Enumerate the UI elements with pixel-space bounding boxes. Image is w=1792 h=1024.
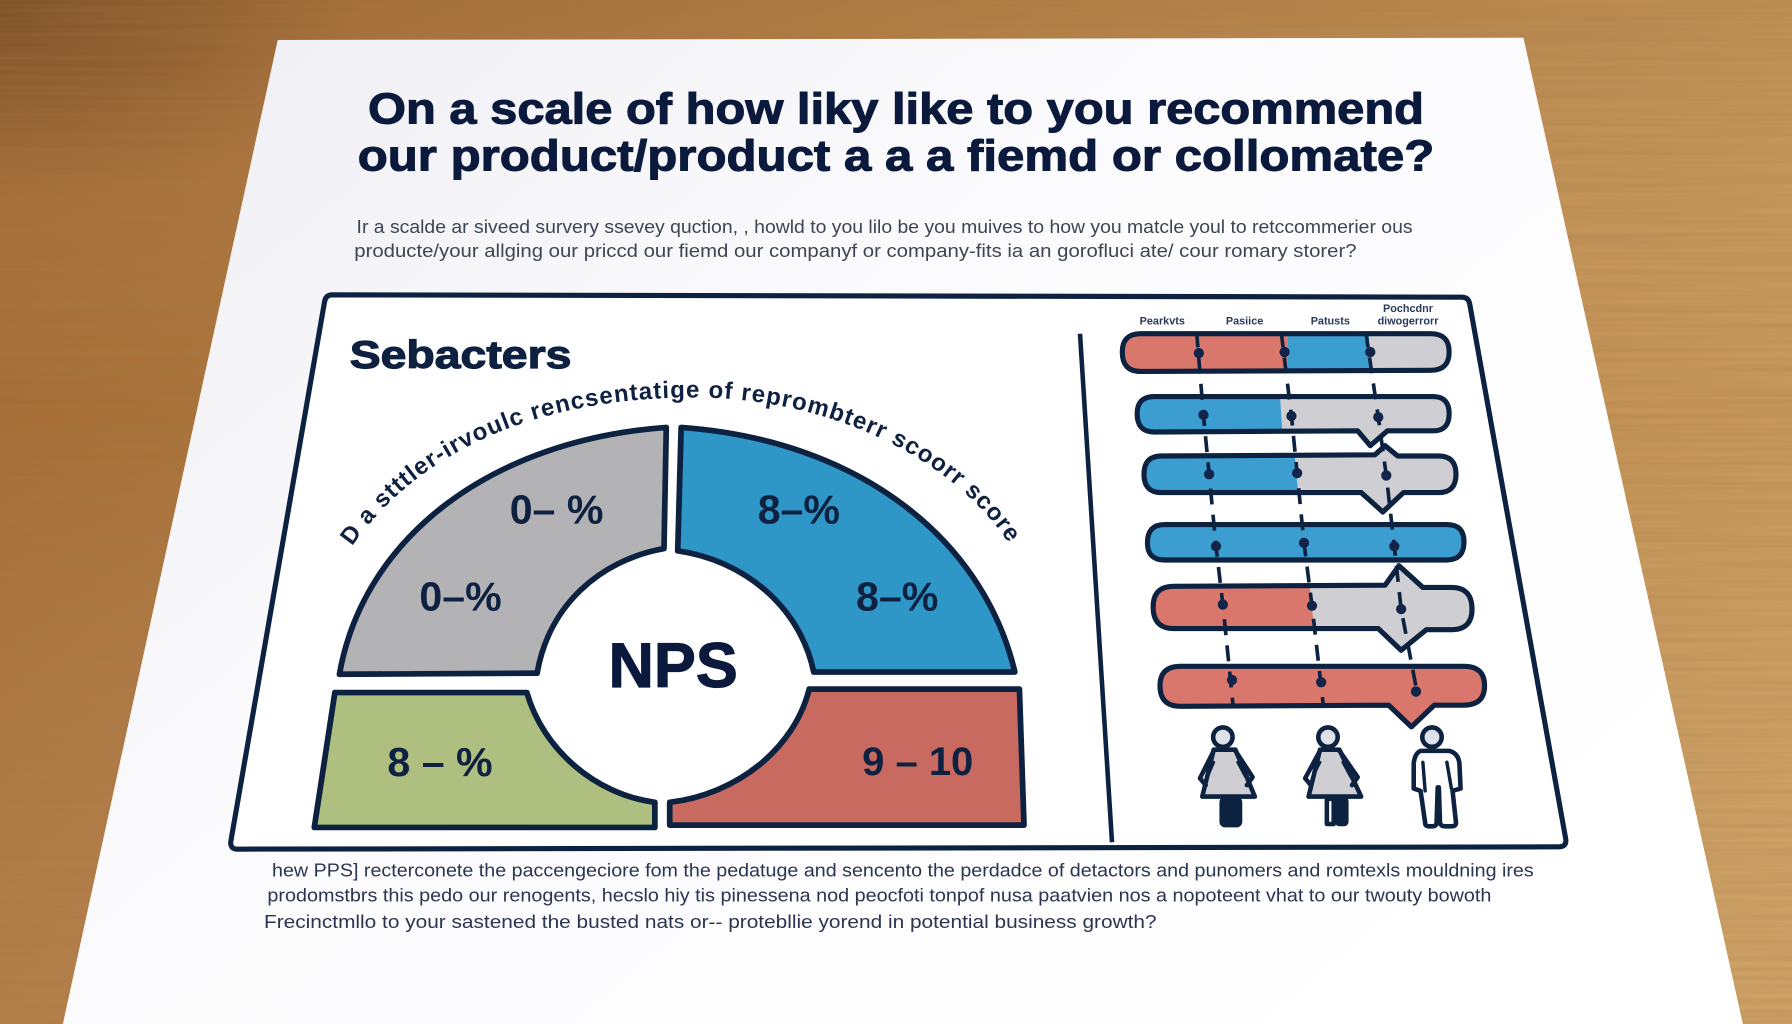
NPS center label: NPS (609, 631, 738, 701)
column labels: diwogerrorr (1378, 316, 1439, 328)
segment: green (314, 693, 655, 827)
NPS semi-donut chart (314, 427, 1024, 827)
curved caption: D a stttler-irvoulc rencsentatige of reprombterr scoorr score (340, 380, 1017, 545)
panel heading: Sebacters (350, 334, 571, 377)
chart values: 8–% (856, 573, 938, 619)
dashed connector lines (1197, 331, 1417, 706)
person icon 3 (1414, 727, 1461, 826)
bar 1 (1122, 334, 1449, 371)
panel divider (1080, 334, 1112, 842)
footer text: Frecinctmllo to your sastened the busted nats or-- protebllie yorend in potential business growth? (264, 911, 1157, 932)
footer text (264, 860, 1534, 932)
stacked bars (1122, 334, 1485, 727)
footer text: hew PPS] recterconete the paccengeciore fom the pedatuge and sencento the perdadce of detactors and punomers and romtexls mouldning ires (272, 860, 1534, 881)
chart values: 8 – % (387, 739, 493, 785)
chart values: 0– % (510, 486, 603, 532)
person icon 2 (1305, 727, 1361, 824)
chart values: 0–% (419, 573, 502, 619)
main panel frame (231, 295, 1566, 849)
chart values (387, 486, 973, 785)
title: our product/product a a a fiemd or collomate? (358, 132, 1434, 180)
data point markers (1194, 347, 1421, 697)
bar 2 (1137, 397, 1449, 446)
segment: grey (339, 427, 666, 674)
column labels: Pasiice (1226, 316, 1263, 328)
bar 4 (1147, 525, 1464, 560)
bar 5 (1153, 566, 1472, 650)
bar 3 (1144, 446, 1456, 512)
chart values: 8–% (758, 486, 840, 532)
column labels: Pearkvts (1140, 316, 1185, 328)
column labels: Patusts (1311, 316, 1350, 328)
person icon 1 (1200, 727, 1255, 825)
intro text: producte/your allging our priccd our fiemd our companyf or company-fits ia an gorofluci ate/ cour romary storer? (354, 240, 1357, 261)
footer text: prodomstbrs this pedo our renogents, hecslo hiy tis pinessena nod peocfoti tonpof nusa paatvien nos a nopoteent vhat to our twouty bowoth (267, 885, 1491, 906)
intro text: Ir a scalde ar siveed survery ssevey quction, , howld to you lilo be you muives to how you matcle youl to retccommerier ous (357, 216, 1413, 237)
column labels: Pochcdnr (1383, 303, 1434, 315)
segment: red (670, 689, 1024, 825)
segment: blue (678, 427, 1015, 672)
chart values: 9 – 10 (862, 740, 973, 784)
bar 6 (1160, 666, 1485, 727)
title (358, 85, 1434, 180)
intro text (354, 216, 1413, 261)
column labels (1140, 303, 1439, 328)
title: On a scale of how liky like to you recommend (368, 85, 1424, 133)
